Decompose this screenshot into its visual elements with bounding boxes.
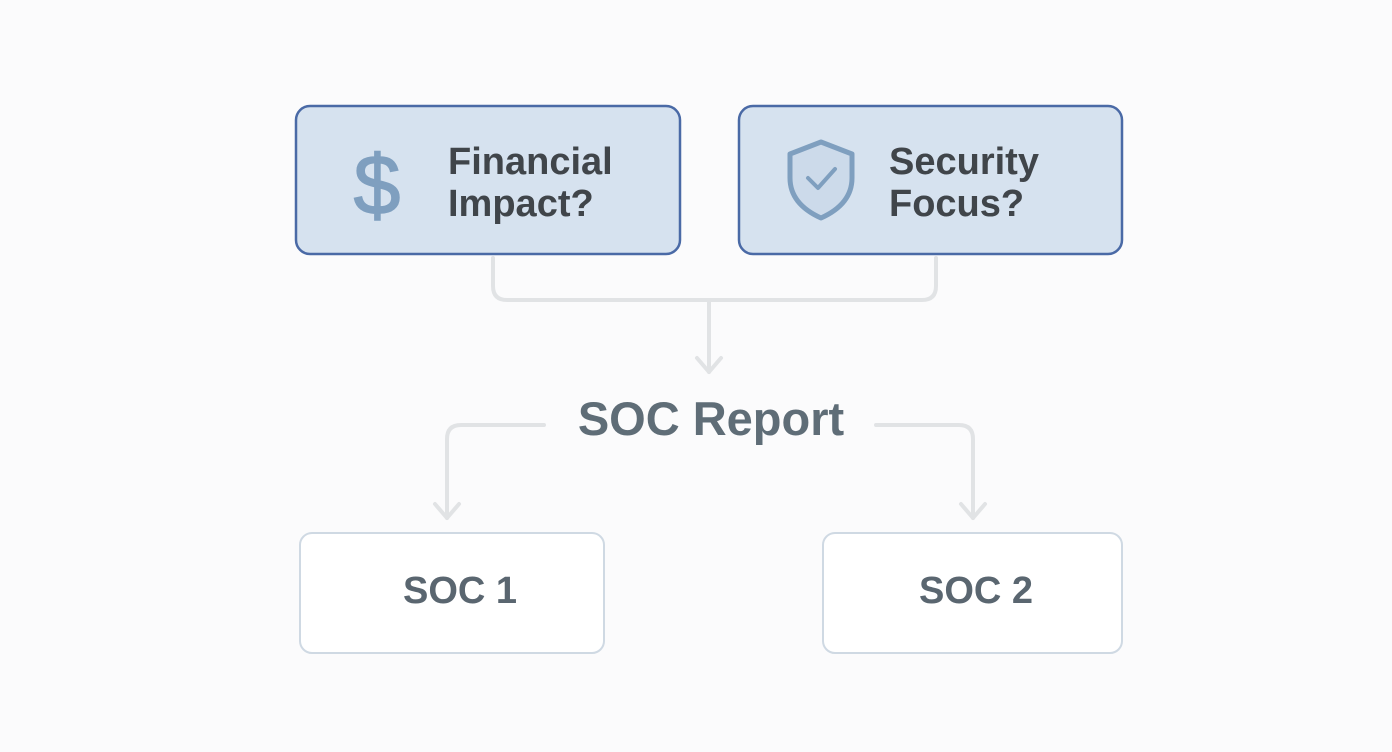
connector: top boxes to SOC Report <box>493 258 936 372</box>
panel: financial impact <box>296 106 680 254</box>
arrow: to SOC 1 <box>435 425 544 518</box>
panel: SOC 1 <box>300 533 604 653</box>
icon: dollar: $ <box>354 138 400 232</box>
icon: shield <box>790 142 852 218</box>
heading: SOC Report: SOC Report <box>578 392 845 445</box>
panel: SOC 2: SOC 2 <box>919 570 1033 612</box>
text: financial impact: Impact? <box>448 183 594 225</box>
panel: security focus <box>739 106 1122 254</box>
text: financial impact: Financial <box>448 141 613 183</box>
arrow: to SOC 2 <box>876 425 985 518</box>
panel: SOC 1: SOC 1 <box>403 570 517 612</box>
text: security focus: Security <box>889 141 1039 183</box>
text: security focus: Focus? <box>889 183 1024 225</box>
panel: SOC 2 <box>823 533 1122 653</box>
